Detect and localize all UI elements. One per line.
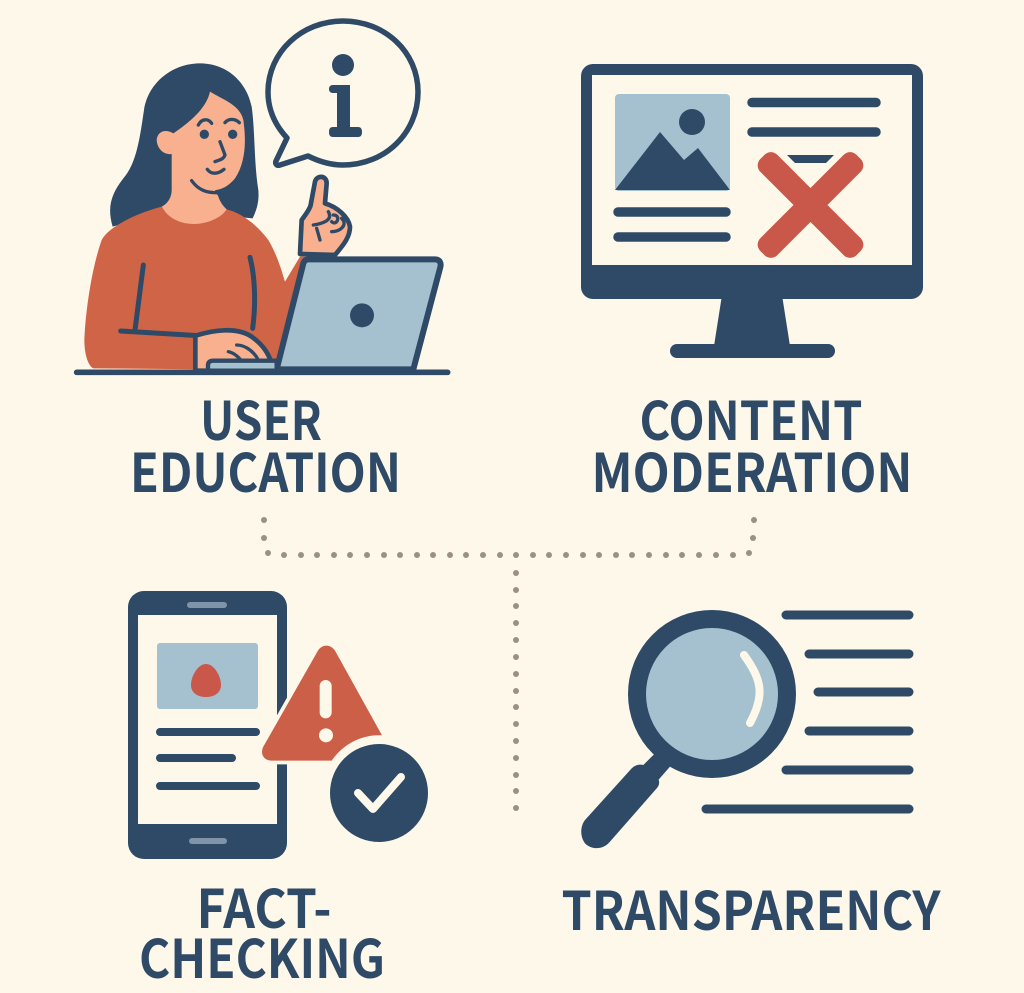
lens highlight xyxy=(744,655,760,723)
finger details xyxy=(313,212,344,240)
laptop xyxy=(77,259,448,372)
label: transparency: TRANSPARENCY xyxy=(562,870,942,946)
warning triangle xyxy=(262,646,382,761)
sweater seams xyxy=(121,257,255,336)
illustration: user education xyxy=(77,21,448,372)
handle xyxy=(581,753,670,848)
red drop xyxy=(191,664,221,697)
lens xyxy=(637,619,787,769)
dotted connector xyxy=(261,517,757,811)
phone text lines xyxy=(160,732,256,786)
text lines xyxy=(706,615,909,809)
raised hand xyxy=(300,177,350,255)
label: user education line 2: EDUCATION xyxy=(130,432,401,508)
woman xyxy=(84,63,350,372)
image placeholder xyxy=(615,94,730,191)
illustration: monitor with rejected content xyxy=(581,64,923,358)
label: fact-checking: FACT- xyxy=(196,868,332,944)
illustration: phone with warning xyxy=(128,591,428,859)
sweater xyxy=(84,207,310,370)
hair xyxy=(110,63,259,227)
label: user education: USER xyxy=(200,380,322,456)
facial features xyxy=(192,119,239,193)
text lines xyxy=(618,102,876,237)
label: fact-checking line 2: CHECKING xyxy=(139,918,385,993)
face and neck xyxy=(157,92,245,226)
label: content moderation: CONTENT xyxy=(640,380,862,456)
label: content moderation line 2: MODERATION xyxy=(592,432,912,508)
typing fingers xyxy=(228,345,258,362)
small trapezoid xyxy=(787,155,834,163)
speech bubble with info icon xyxy=(268,21,418,165)
check badge xyxy=(330,744,428,842)
illustration: magnifying glass xyxy=(581,615,909,848)
typing hand xyxy=(195,330,277,372)
red x xyxy=(714,109,907,301)
